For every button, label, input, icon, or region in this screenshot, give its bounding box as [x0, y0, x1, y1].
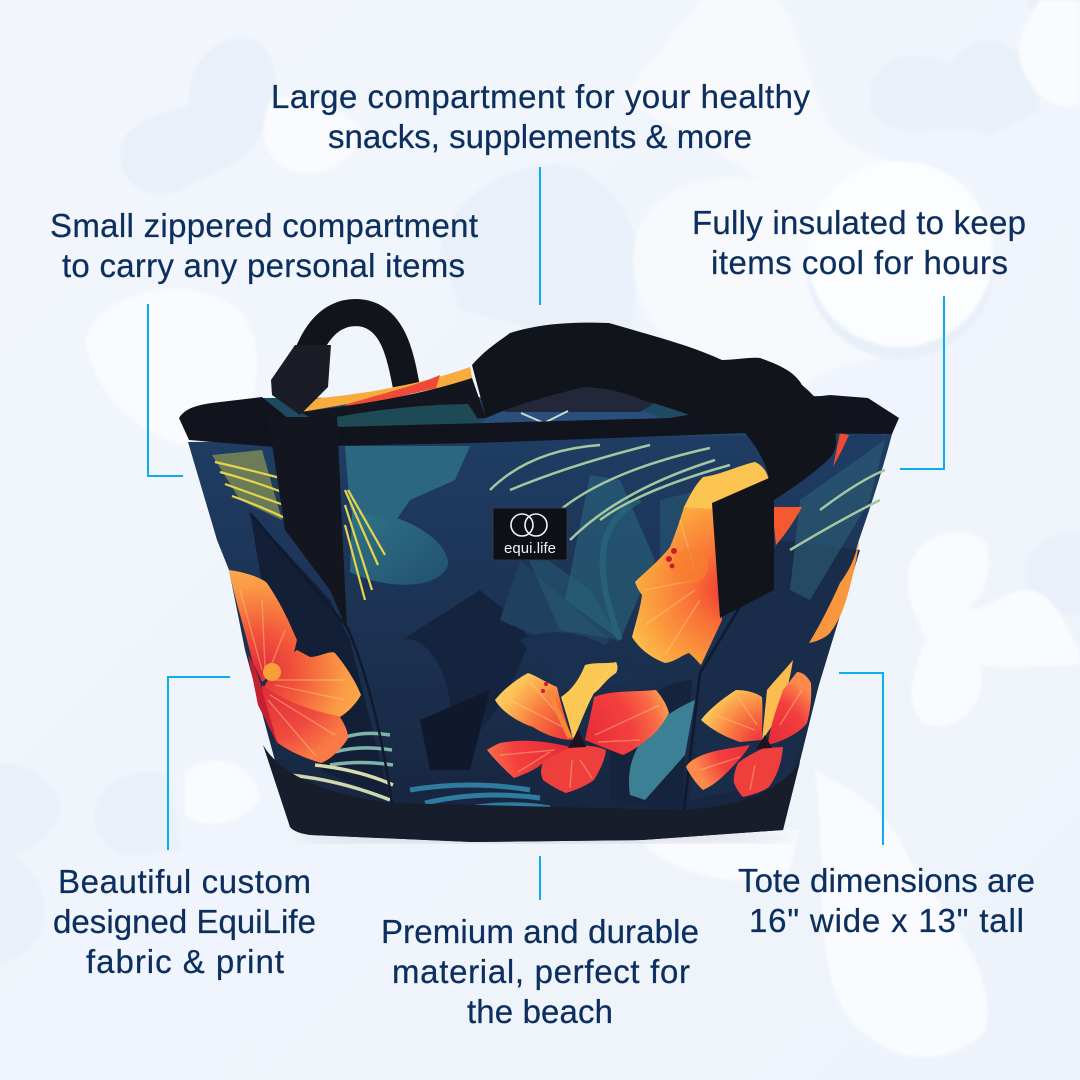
flower: far right edge	[809, 540, 859, 643]
heading: fully insulated	[692, 204, 1026, 281]
heading: custom fabric: Beautiful custom	[58, 863, 311, 900]
flower: lower right	[686, 660, 811, 797]
logo rings	[511, 514, 547, 536]
inner lining	[190, 396, 890, 440]
heading: dimensions	[738, 862, 1035, 939]
bottom left fern	[290, 733, 393, 800]
heading: large compartment: snacks, supplements & more	[328, 118, 752, 155]
tote bag	[179, 313, 899, 843]
heading: premium material: material, perfect for	[392, 953, 690, 990]
front band	[179, 395, 899, 447]
pocket seams	[250, 513, 774, 810]
bottom blue fern	[410, 785, 550, 812]
dark foliage	[250, 513, 860, 810]
bag shadow	[295, 833, 795, 843]
heading: dimensions: 16" wide x 13" tall	[749, 902, 1024, 939]
large round leaf	[350, 510, 448, 585]
heading: fully insulated: items cool for hours	[711, 244, 1008, 281]
heading: large compartment	[271, 78, 810, 155]
callout line: large compartment	[539, 167, 541, 305]
bag base	[263, 745, 800, 842]
heading: premium material	[381, 913, 699, 1030]
flower: center	[487, 662, 669, 793]
heading: small zippered compartment	[50, 207, 478, 284]
bag body fabric	[188, 434, 892, 842]
pale green palm fronds	[490, 445, 885, 550]
back handle base	[271, 345, 331, 415]
heading: dimensions: Tote dimensions are	[738, 862, 1035, 899]
heading: small zippered compartment: to carry any personal items	[62, 247, 465, 284]
teal leaf right	[629, 700, 695, 800]
front left strap	[268, 417, 347, 630]
heading: custom fabric: fabric & print	[86, 943, 284, 980]
yellow palm frond	[212, 450, 282, 520]
brand label: equi.life	[504, 540, 556, 557]
heading: custom fabric: designed EquiLife	[53, 903, 316, 940]
callout line: dimensions	[839, 673, 883, 845]
callout line: material	[539, 856, 541, 900]
back handle	[298, 313, 406, 392]
flower: left	[229, 570, 361, 763]
brand label	[493, 508, 567, 560]
heading: fully insulated: Fully insulated to keep	[692, 204, 1026, 241]
teal palm leaf fan	[520, 475, 720, 640]
flower: large right	[632, 462, 802, 665]
callout line: insulated	[900, 296, 944, 469]
heading: small zippered compartment: Small zippered compartment	[50, 207, 478, 244]
callout line: small compartment	[148, 304, 183, 476]
front main handle	[472, 323, 836, 618]
printed pocket flap	[299, 367, 473, 412]
heading: large compartment: Large compartment for your healthy	[271, 78, 810, 115]
heading: custom fabric	[53, 863, 316, 980]
heading: premium material: the beach	[467, 993, 613, 1030]
teal top leaves	[345, 446, 470, 522]
callout line: fabric	[168, 677, 230, 850]
petal: far right top red	[833, 433, 849, 467]
heading: premium material: Premium and durable	[381, 913, 699, 950]
